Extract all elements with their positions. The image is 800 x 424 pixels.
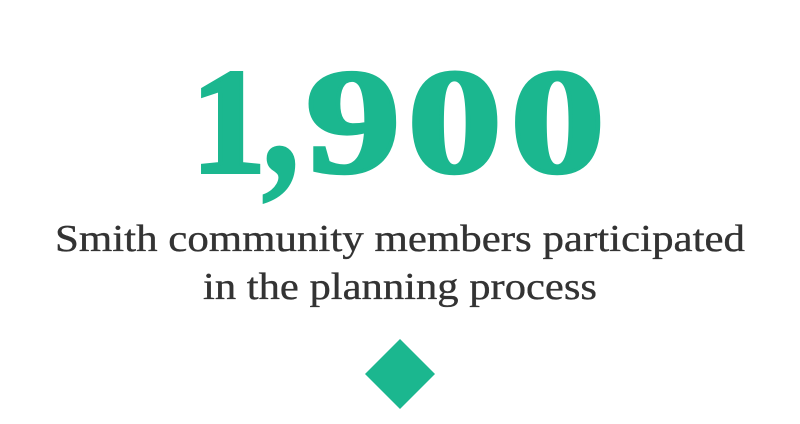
- big number: 1,900: [191, 5, 605, 215]
- caption text: in the planning process: [203, 266, 597, 308]
- caption text: Smith community members participated: [55, 218, 745, 260]
- big number: 1,900: ,: [261, 5, 301, 215]
- caption text: [55, 218, 745, 308]
- big number: 1,900: 1: [191, 39, 266, 205]
- icon: diamond: [365, 339, 435, 409]
- big number: 1,900: 900: [306, 39, 605, 205]
